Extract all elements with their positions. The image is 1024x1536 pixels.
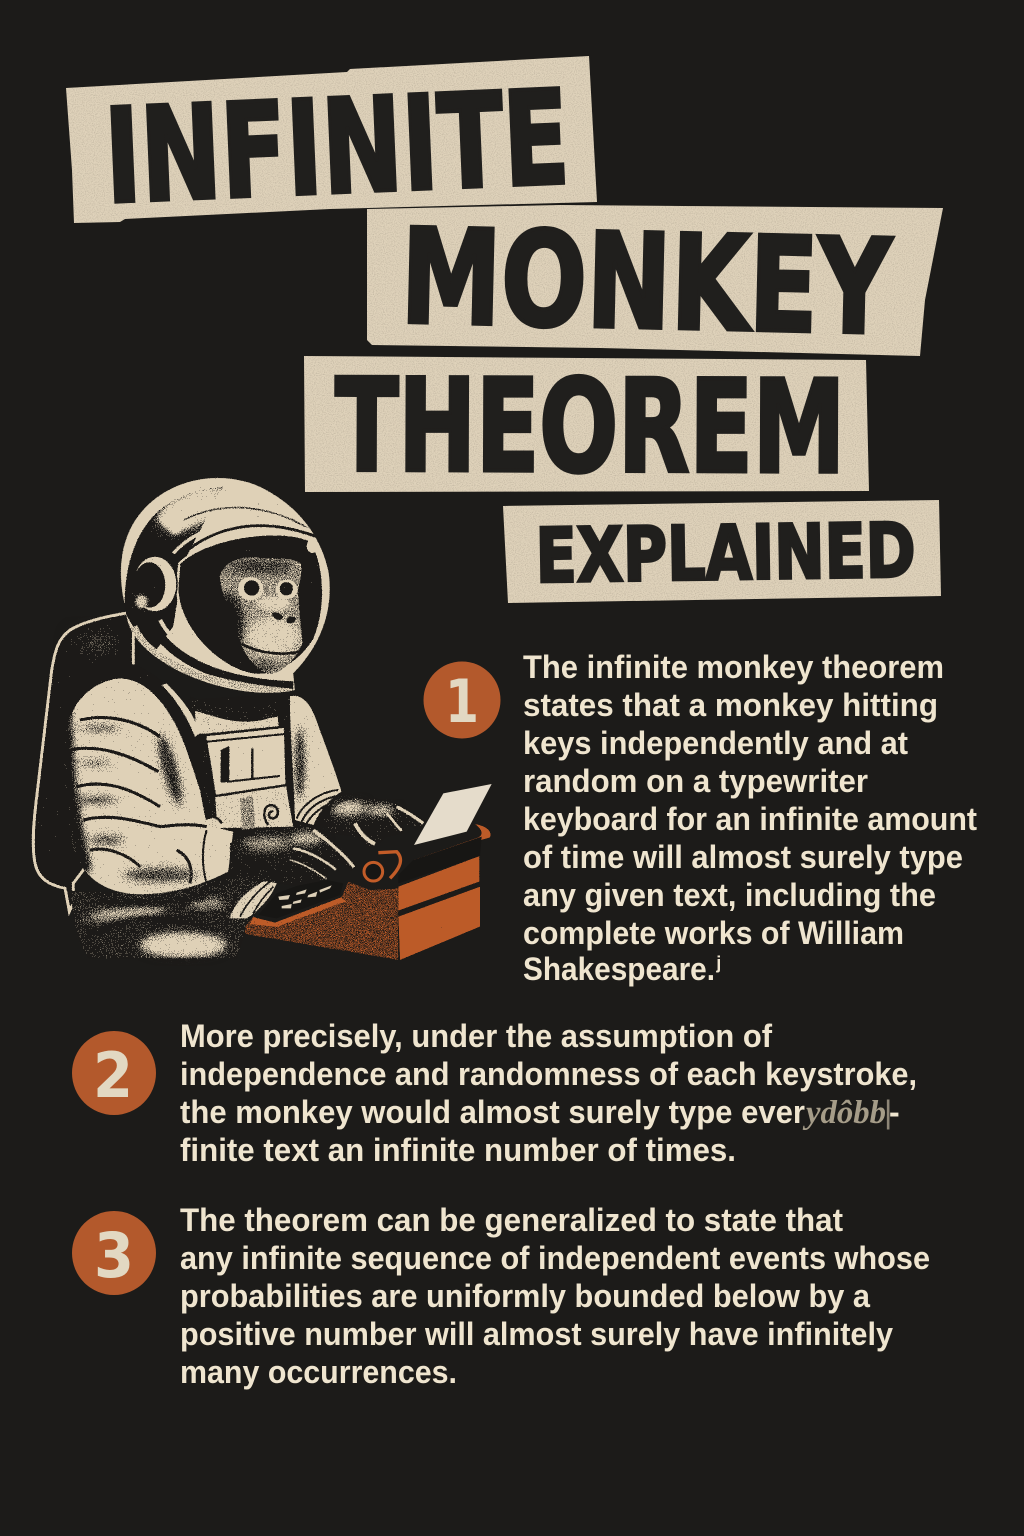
text block 3: probabilities are uniformly bounded below by a <box>180 1278 870 1314</box>
number badge 3: 3 <box>94 1219 134 1292</box>
backpack shading <box>73 631 120 655</box>
helmet <box>121 472 330 693</box>
paper <box>414 784 492 845</box>
chest pack <box>205 727 287 796</box>
number badge 3 <box>72 1211 156 1295</box>
text block 2: the monkey would almost surely type ever <box>180 1094 805 1130</box>
strip: EXPLAINED: EXPLAINED <box>535 506 916 600</box>
text block 1 <box>523 649 977 987</box>
astronaut monkey figure <box>33 472 424 958</box>
step 3 <box>72 1202 930 1390</box>
step 2 <box>72 1018 917 1168</box>
near glove <box>230 827 356 886</box>
strip: THEOREM: THEOREM <box>335 352 845 503</box>
text block 3: many occurrences. <box>180 1354 457 1390</box>
illustration: astronaut monkey at typewriter <box>33 472 492 960</box>
text block 1: keys independently and at <box>523 725 908 761</box>
text block 1: of time will almost surely type <box>523 839 963 875</box>
swirls <box>264 805 278 825</box>
text block 3 <box>180 1202 930 1390</box>
legs <box>70 875 283 958</box>
monkey face <box>213 557 303 675</box>
text block 1: random on a typewriter <box>523 763 868 799</box>
typewriter <box>245 784 492 960</box>
number badge 1: 1 <box>445 667 479 737</box>
ear piece <box>133 556 177 612</box>
collar shadow <box>190 697 290 720</box>
far glove <box>323 798 424 848</box>
backpack <box>33 613 133 912</box>
garbled glyphs: ydôbb <box>802 1095 886 1131</box>
text block 1: complete works of William <box>523 915 904 951</box>
sleeve fold <box>230 875 278 918</box>
text block 1: keyboard for an infinite amount <box>523 801 977 837</box>
strip: MONKEY: MONKEY <box>399 200 894 364</box>
text block 1: ʲ <box>716 951 721 981</box>
near arm <box>62 678 233 894</box>
text block 1: any given text, including the <box>523 877 936 913</box>
text block 1: Shakespeare. <box>523 951 715 987</box>
shoulder strap <box>110 658 205 820</box>
number badge 2: 2 <box>93 1039 133 1112</box>
eyes <box>238 577 263 600</box>
text block 2: finite text an infinite number of times. <box>180 1132 736 1168</box>
text block 2 <box>180 1018 917 1168</box>
text block 1: The infinite monkey theorem <box>523 649 944 685</box>
far arm <box>290 696 345 825</box>
text block 1: states that a monkey hitting <box>523 687 938 723</box>
strip: INFINITE: INFINITE <box>102 62 572 233</box>
garbled glyphs: - <box>889 1094 900 1130</box>
number badge 2 <box>72 1031 156 1115</box>
title <box>66 56 943 603</box>
torso <box>187 693 340 835</box>
roller knob <box>364 852 400 881</box>
nose <box>271 611 284 621</box>
visor <box>177 534 323 675</box>
step 1 <box>424 649 977 987</box>
text block 3: any infinite sequence of independent events whose <box>180 1240 930 1276</box>
keyboard <box>258 880 343 918</box>
text block 2: independence and randomness of each keystroke, <box>180 1056 917 1092</box>
text block 3: The theorem can be generalized to state that <box>180 1202 843 1238</box>
typewriter carriage <box>398 837 482 883</box>
visor glint <box>307 539 318 553</box>
text block 2: More precisely, under the assumption of <box>180 1018 772 1054</box>
number badge 1 <box>424 662 500 738</box>
typewriter body <box>245 824 491 960</box>
garbled glyphs: | <box>884 1094 892 1130</box>
mouth <box>242 644 299 654</box>
text block 3: positive number will almost surely have infinitely <box>180 1316 893 1352</box>
